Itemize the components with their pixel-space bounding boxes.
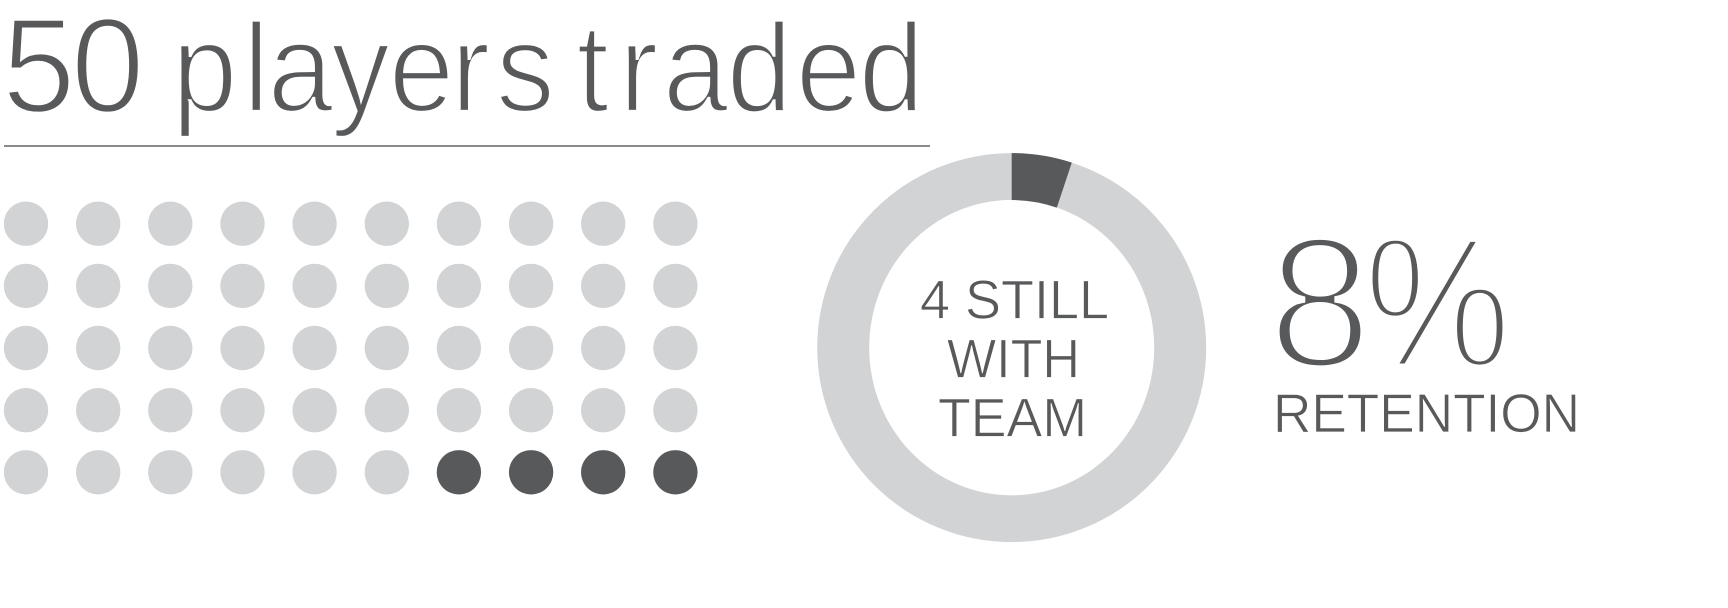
dot grid: 50 players <box>4 202 698 494</box>
donut label: TEAM <box>938 386 1087 448</box>
big number: % <box>1364 198 1511 407</box>
big number: 8 <box>1268 198 1372 407</box>
donut label: 4 STILL <box>920 268 1109 330</box>
title rule <box>4 145 930 147</box>
retention label: RETENTION <box>1273 382 1580 444</box>
donut label <box>920 268 1109 448</box>
donut dark segment <box>1012 153 1072 208</box>
title: players traded <box>172 0 924 138</box>
donut chart <box>817 153 1206 542</box>
big number <box>1268 198 1511 407</box>
donut label: WITH <box>947 328 1080 390</box>
